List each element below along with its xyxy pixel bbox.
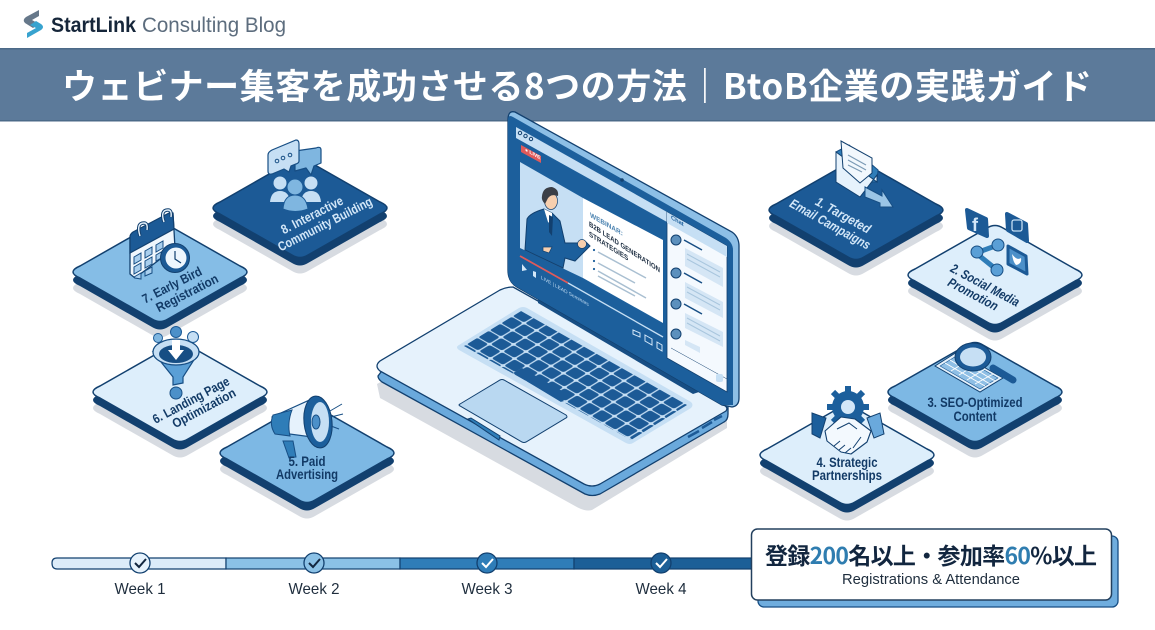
icon: social media: f — [972, 215, 979, 235]
title: ウェビナー集客を成功させる8つの方法｜BtoB企業の実践ガイド — [62, 59, 1092, 110]
icon: magnifier and keyboard — [935, 343, 1013, 392]
slide text: WEBINAR: — [590, 210, 623, 238]
tile 8: interactive community building — [213, 140, 387, 274]
video controls: LIVE | LEAD Seminars — [541, 275, 589, 308]
label: 7. Early Bird — [140, 264, 204, 306]
space bar — [513, 368, 571, 402]
video panel — [520, 162, 663, 323]
laptop shadow — [377, 310, 727, 510]
goal callout — [752, 529, 1118, 607]
label: 4. Strategic — [816, 454, 878, 470]
tile 7: early bird registration: Registration — [153, 271, 221, 315]
icon: chat and people — [268, 140, 321, 212]
tile 1: targeted email campaigns — [769, 141, 943, 276]
slide text: B2B LEAD GENERATION — [589, 219, 660, 275]
logo mark — [24, 10, 43, 38]
icon: envelope and arrow — [836, 141, 893, 207]
progress bar — [52, 558, 754, 569]
trackpad — [459, 380, 567, 442]
live badge — [521, 145, 541, 163]
tile 7: early bird registration — [73, 210, 247, 338]
timeline — [52, 553, 754, 598]
slide text: STRATEGIES — [589, 229, 628, 263]
laptop lid — [508, 112, 739, 407]
milestone: week 3 — [462, 553, 513, 598]
tile 4: strategic partnerships — [760, 386, 934, 520]
keyboard — [457, 307, 692, 444]
milestone: week 4 — [636, 553, 687, 598]
tile 6: landing page optimization — [93, 326, 267, 458]
milestone: week 3: Week 3 — [462, 581, 513, 598]
front notch — [468, 418, 500, 440]
tile 5: paid advertising: Advertising — [276, 466, 338, 482]
milestone: week 4: Week 4 — [636, 581, 687, 598]
tile 8: interactive community building: Community Building — [275, 194, 375, 254]
label: 2. Social Media — [947, 260, 1022, 309]
milestone: week 2: Week 2 — [288, 581, 340, 598]
presenter — [525, 187, 590, 268]
chat messages — [671, 240, 727, 382]
tile 3: seo-optimized content: Content — [954, 408, 997, 424]
tile 5: paid advertising — [220, 395, 394, 518]
chat panel — [667, 212, 727, 392]
chat panel: Chat — [671, 214, 684, 229]
logo text — [51, 14, 286, 37]
goal headline: 登録200名以上・参加率60%以上 — [765, 537, 1097, 571]
icon: calendar and clock — [130, 210, 190, 279]
label: 6. Landing Page — [150, 373, 232, 427]
tile 2: social media promotion — [908, 210, 1082, 340]
icon: megaphone — [271, 395, 343, 458]
tile 3: seo-optimized content — [888, 342, 1062, 458]
video controls — [520, 256, 663, 351]
tile 1: targeted email campaigns: Email Campaigns — [787, 196, 873, 252]
chat avatars — [671, 235, 681, 339]
milestone: week 1: Week 1 — [114, 581, 166, 598]
icon: funnel — [153, 326, 199, 399]
slide bullets — [593, 249, 646, 298]
tile 2: social media promotion: Promotion — [945, 274, 1001, 314]
hinge — [538, 285, 702, 394]
milestone: week 2 — [288, 553, 340, 598]
ports — [688, 416, 722, 437]
icon: gear and handshake — [812, 386, 884, 454]
label: 5. Paid — [288, 453, 326, 469]
screen top bar — [516, 127, 667, 222]
title banner — [0, 48, 1155, 122]
label: 8. Interactive — [278, 193, 346, 237]
laptop — [377, 112, 739, 511]
label: 1. Targeted — [813, 194, 874, 237]
milestone: week 1 — [114, 553, 166, 598]
logo — [24, 10, 286, 38]
live badge: ● LIVE — [525, 147, 541, 162]
tile 6: landing page optimization: Optimization — [169, 385, 238, 431]
goal subtitle: Registrations & Attendance — [842, 571, 1020, 588]
logo text: StartLink — [51, 14, 136, 37]
label: 3. SEO-Optimized — [928, 394, 1022, 410]
laptop base — [377, 287, 728, 496]
tile 4: strategic partnerships: Partnerships — [812, 467, 882, 483]
logo text: Consulting Blog — [142, 14, 286, 37]
icon: social media — [967, 210, 1027, 276]
